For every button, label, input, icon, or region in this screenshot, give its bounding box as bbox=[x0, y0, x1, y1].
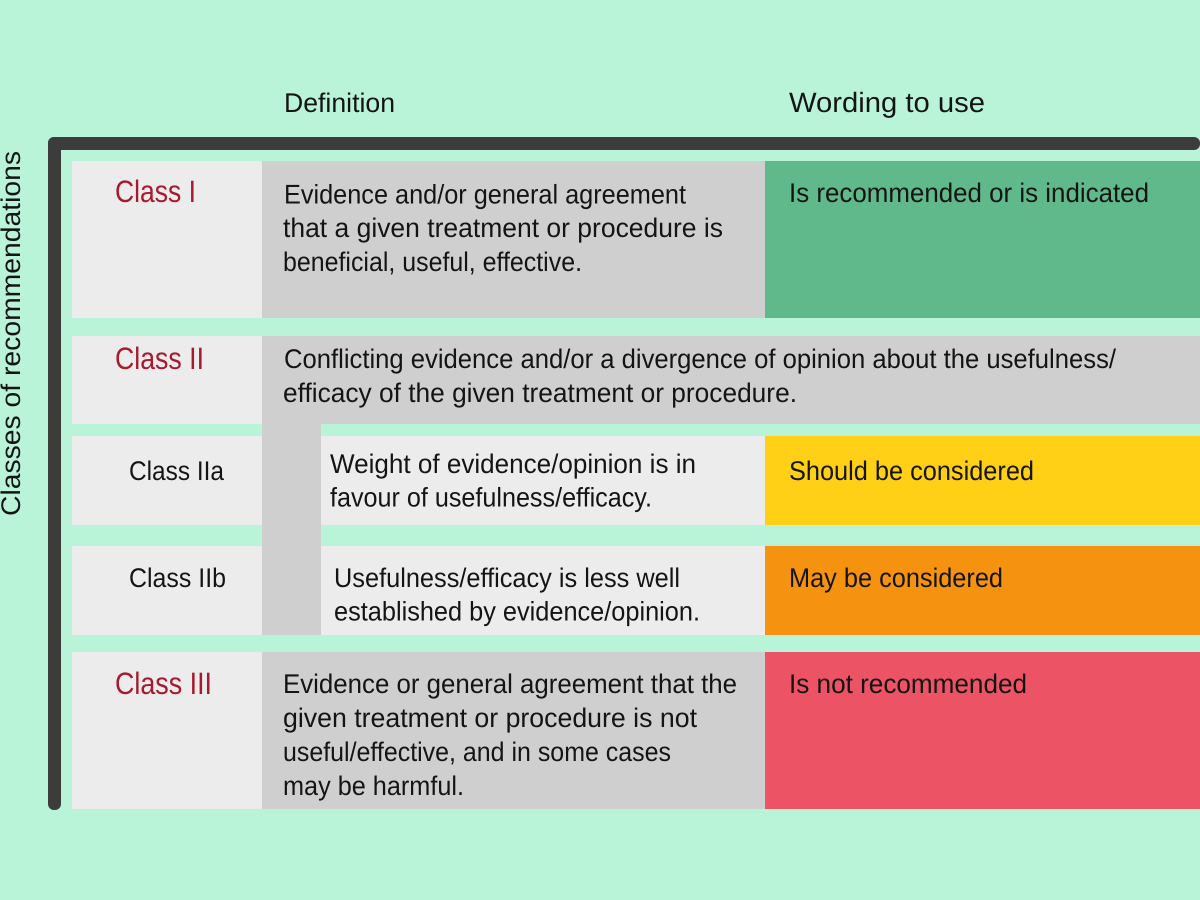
definition text: Class II: efficacy of the given treatment or procedure. bbox=[283, 378, 797, 408]
definition text: Class III: given treatment or procedure is not bbox=[283, 703, 697, 733]
connector column bbox=[262, 424, 321, 635]
definition text: Class III bbox=[283, 669, 737, 801]
wording text: Class III: Is not recommended bbox=[789, 669, 1027, 699]
label cell: Class III bbox=[72, 652, 262, 809]
label text: Class I: Class I bbox=[115, 174, 196, 209]
definition cell: Class IIa bbox=[321, 436, 765, 525]
label cell: Class II bbox=[72, 336, 262, 424]
definition text: Class II: Conflicting evidence and/or a divergence of opinion about the usefulness/ bbox=[284, 344, 1116, 374]
wording cell: Class III bbox=[765, 652, 1200, 809]
row: Class I bbox=[72, 161, 1200, 318]
row: Class II bbox=[72, 336, 1200, 635]
definition text: Class III: useful/effective, and in some cases bbox=[283, 737, 671, 767]
heading: Definition: Definition bbox=[284, 88, 395, 118]
label text: Class II: Class II bbox=[115, 341, 204, 376]
definition text: Class I: beneficial, useful, effective. bbox=[283, 247, 582, 277]
definition text: Class IIb: Usefulness/efficacy is less well bbox=[334, 563, 680, 593]
definition cell: Class III bbox=[262, 652, 765, 809]
wording text: Class IIa: Should be considered bbox=[789, 456, 1034, 486]
label cell: Class IIa bbox=[72, 436, 262, 525]
label text: Class IIa: Class IIa bbox=[129, 456, 225, 486]
wording cell: Class I bbox=[765, 161, 1200, 318]
wording text: Class IIb: May be considered bbox=[789, 563, 1003, 593]
wording text: Class I: Is recommended or is indicated bbox=[789, 178, 1149, 208]
definition cell: Class I bbox=[262, 161, 765, 318]
definition text: Class III: Evidence or general agreement that the bbox=[283, 669, 737, 699]
definition text: Class I bbox=[283, 180, 723, 277]
definition cell: Class IIb bbox=[321, 546, 765, 635]
label text: Class IIb: Class IIb bbox=[129, 563, 226, 593]
definition text: Class I: Evidence and/or general agreement bbox=[284, 180, 686, 210]
label text: Class III: Class III bbox=[115, 666, 212, 701]
definition text: Class IIa: favour of usefulness/efficacy. bbox=[330, 482, 652, 512]
wording cell: Class IIb bbox=[765, 546, 1200, 635]
axis bracket bbox=[48, 137, 1200, 810]
definition text: Class IIb bbox=[334, 563, 700, 626]
row: Class III bbox=[72, 652, 1200, 809]
label cell: Class I bbox=[72, 161, 262, 318]
definition text: Class II bbox=[283, 344, 1116, 408]
definition text: Class IIa bbox=[330, 449, 696, 512]
definition text: Class IIb: established by evidence/opinion. bbox=[334, 596, 700, 626]
definition text: Class I: that a given treatment or procedure is bbox=[283, 213, 723, 243]
definition band: Class II bbox=[262, 336, 1200, 424]
label cell: Class IIb bbox=[72, 546, 262, 635]
definition text: Class III: may be harmful. bbox=[283, 771, 464, 801]
wording cell: Class IIa bbox=[765, 436, 1200, 525]
definition text: Class IIa: Weight of evidence/opinion is in bbox=[330, 449, 696, 479]
heading: Wording to use: Wording to use bbox=[789, 87, 985, 118]
